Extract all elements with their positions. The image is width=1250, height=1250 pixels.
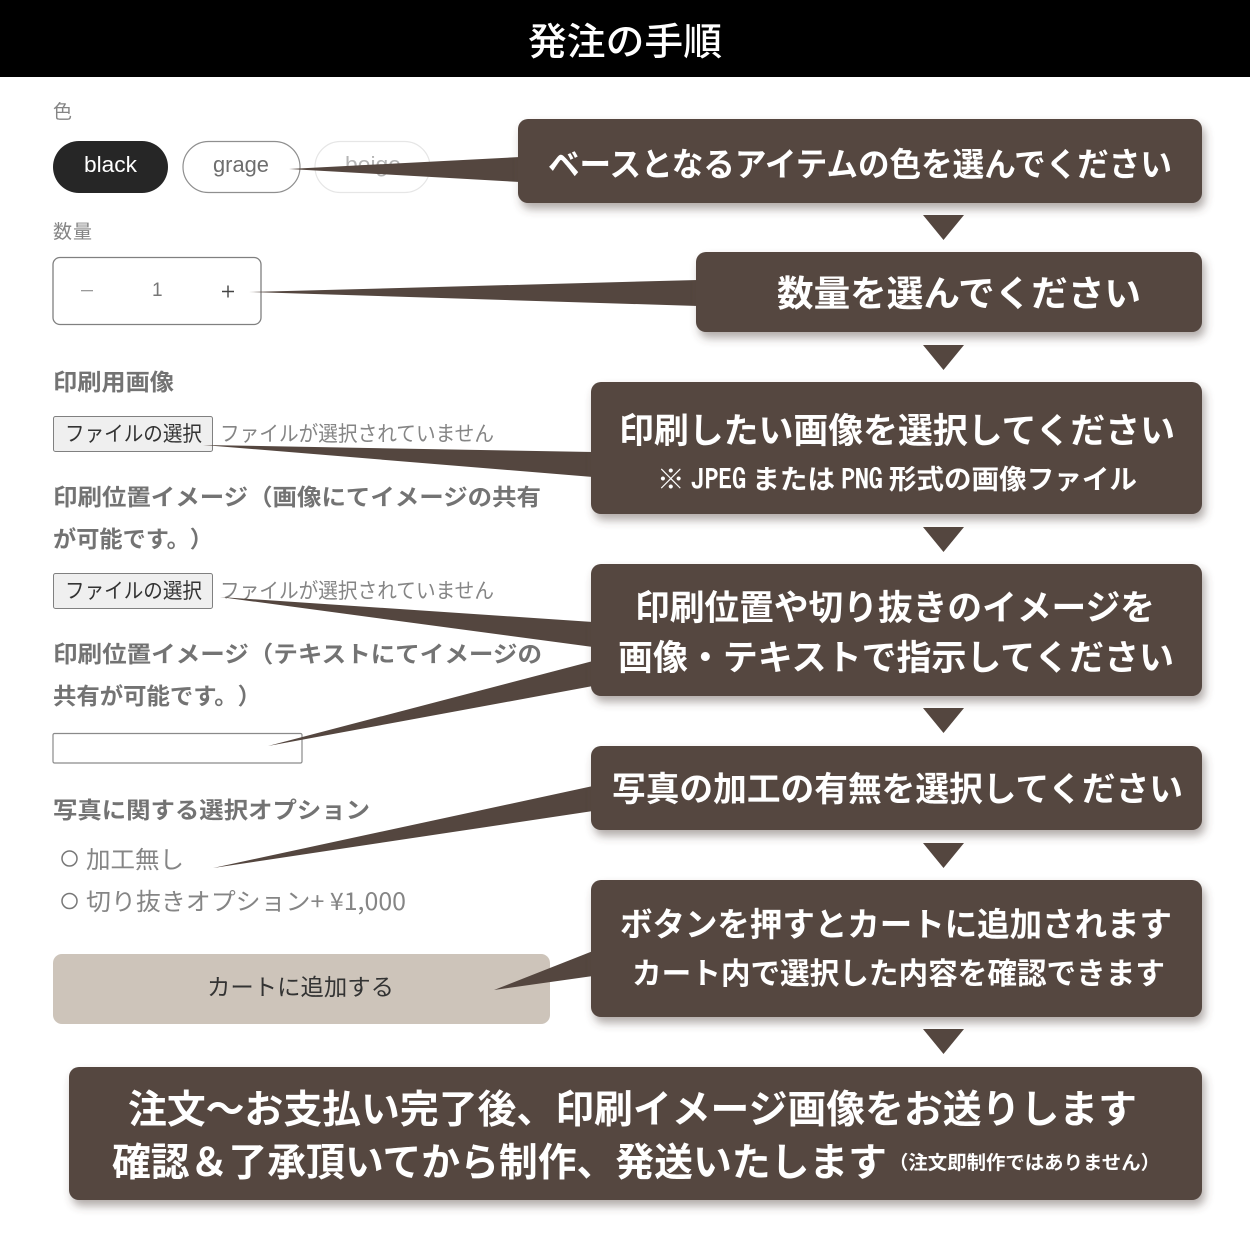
- form: print position image field: が可能です。）: [53, 520, 213, 554]
- form: print image field: ファイルの選択: [65, 418, 202, 448]
- form: print image field: ファイルが選択されていません: [220, 418, 494, 448]
- arrow: [923, 843, 964, 868]
- pointer: position image: [220, 597, 593, 647]
- form: color selector: 色: [53, 97, 72, 124]
- callout: after order: [69, 1067, 1202, 1200]
- arrow: [923, 1029, 964, 1054]
- form: color selector: beige: [345, 152, 401, 177]
- callout: add to cart: ボタンを押すとカートに追加されます: [620, 898, 1172, 946]
- arrow: [923, 708, 964, 733]
- pointer: photo option: [213, 786, 593, 868]
- arrow: [923, 345, 964, 370]
- form: photo option radio group: 写真に関する選択オプション: [53, 791, 370, 825]
- form: add to cart button: [53, 954, 550, 1024]
- callout: after order: 注文〜お支払い完了後、印刷イメージ画像をお送りします: [128, 1079, 1137, 1135]
- form: print image field: 印刷用画像: [53, 363, 174, 397]
- title bar: [0, 0, 1250, 77]
- pointer: quantity: [249, 280, 698, 306]
- callout: choose quantity: [696, 252, 1202, 332]
- callout: add to cart: [591, 880, 1202, 1017]
- form: print image field: [53, 363, 494, 452]
- form: print position text field: 印刷位置イメージ（テキストにてイメージの: [53, 635, 542, 669]
- callout: after order: （注文即制作ではありません）: [889, 1148, 1160, 1175]
- callout: photo processing: 写真の加工の有無を選択してください: [612, 762, 1183, 811]
- form: quantity stepper: 1: [152, 280, 163, 301]
- form: print position text field: 共有が可能です。）: [53, 677, 261, 711]
- callout: choose color: ベースとなるアイテムの色を選んでください: [548, 138, 1172, 186]
- form: quantity stepper: [53, 217, 261, 324]
- form: color selector: grage: [213, 152, 269, 177]
- form: color selector: [53, 97, 430, 193]
- form: print position text field: [53, 635, 542, 763]
- form: print position image field: [53, 478, 541, 608]
- form: add to cart button: カートに追加する: [207, 968, 394, 1002]
- callout: position instructions: 画像・テキストで指示してください: [618, 630, 1174, 681]
- pointer: print image: [203, 445, 593, 477]
- form: print position image field: ファイルが選択されていません: [220, 575, 494, 605]
- title bar: 発注の手順: [528, 11, 722, 66]
- callout: photo processing: [591, 746, 1202, 830]
- arrow: [923, 215, 964, 240]
- pointer: color: [289, 157, 520, 182]
- form: print position image field: 印刷位置イメージ（画像にてイメージの共有: [53, 478, 541, 512]
- form: quantity stepper: 数量: [53, 217, 92, 244]
- callout: add to cart: カート内で選択した内容を確認できます: [632, 949, 1165, 993]
- callout: choose print image: [591, 382, 1202, 514]
- pointer: position text: [268, 661, 593, 746]
- callout: choose print image: 印刷したい画像を選択してください: [619, 403, 1175, 454]
- callout: position instructions: 印刷位置や切り抜きのイメージを: [635, 580, 1155, 631]
- form: photo option radio group: 切り抜きオプション+ ¥1,000: [86, 882, 406, 917]
- callout: choose color: [518, 119, 1202, 203]
- callout: choose print image: ※ JPEG または PNG 形式の画像ファイル: [657, 458, 1137, 497]
- form: print position image field: ファイルの選択: [65, 575, 202, 605]
- callout: after order: 確認＆了承頂いてから制作、発送いたします: [112, 1132, 887, 1188]
- form: photo option radio group: [53, 791, 406, 917]
- form: color selector: black: [84, 152, 138, 177]
- callout: position instructions: [591, 564, 1202, 696]
- pointer: cart button: [494, 951, 593, 990]
- arrow: [923, 527, 964, 552]
- callout: choose quantity: 数量を選んでください: [777, 265, 1141, 317]
- form: photo option radio group: 加工無し: [86, 840, 184, 875]
